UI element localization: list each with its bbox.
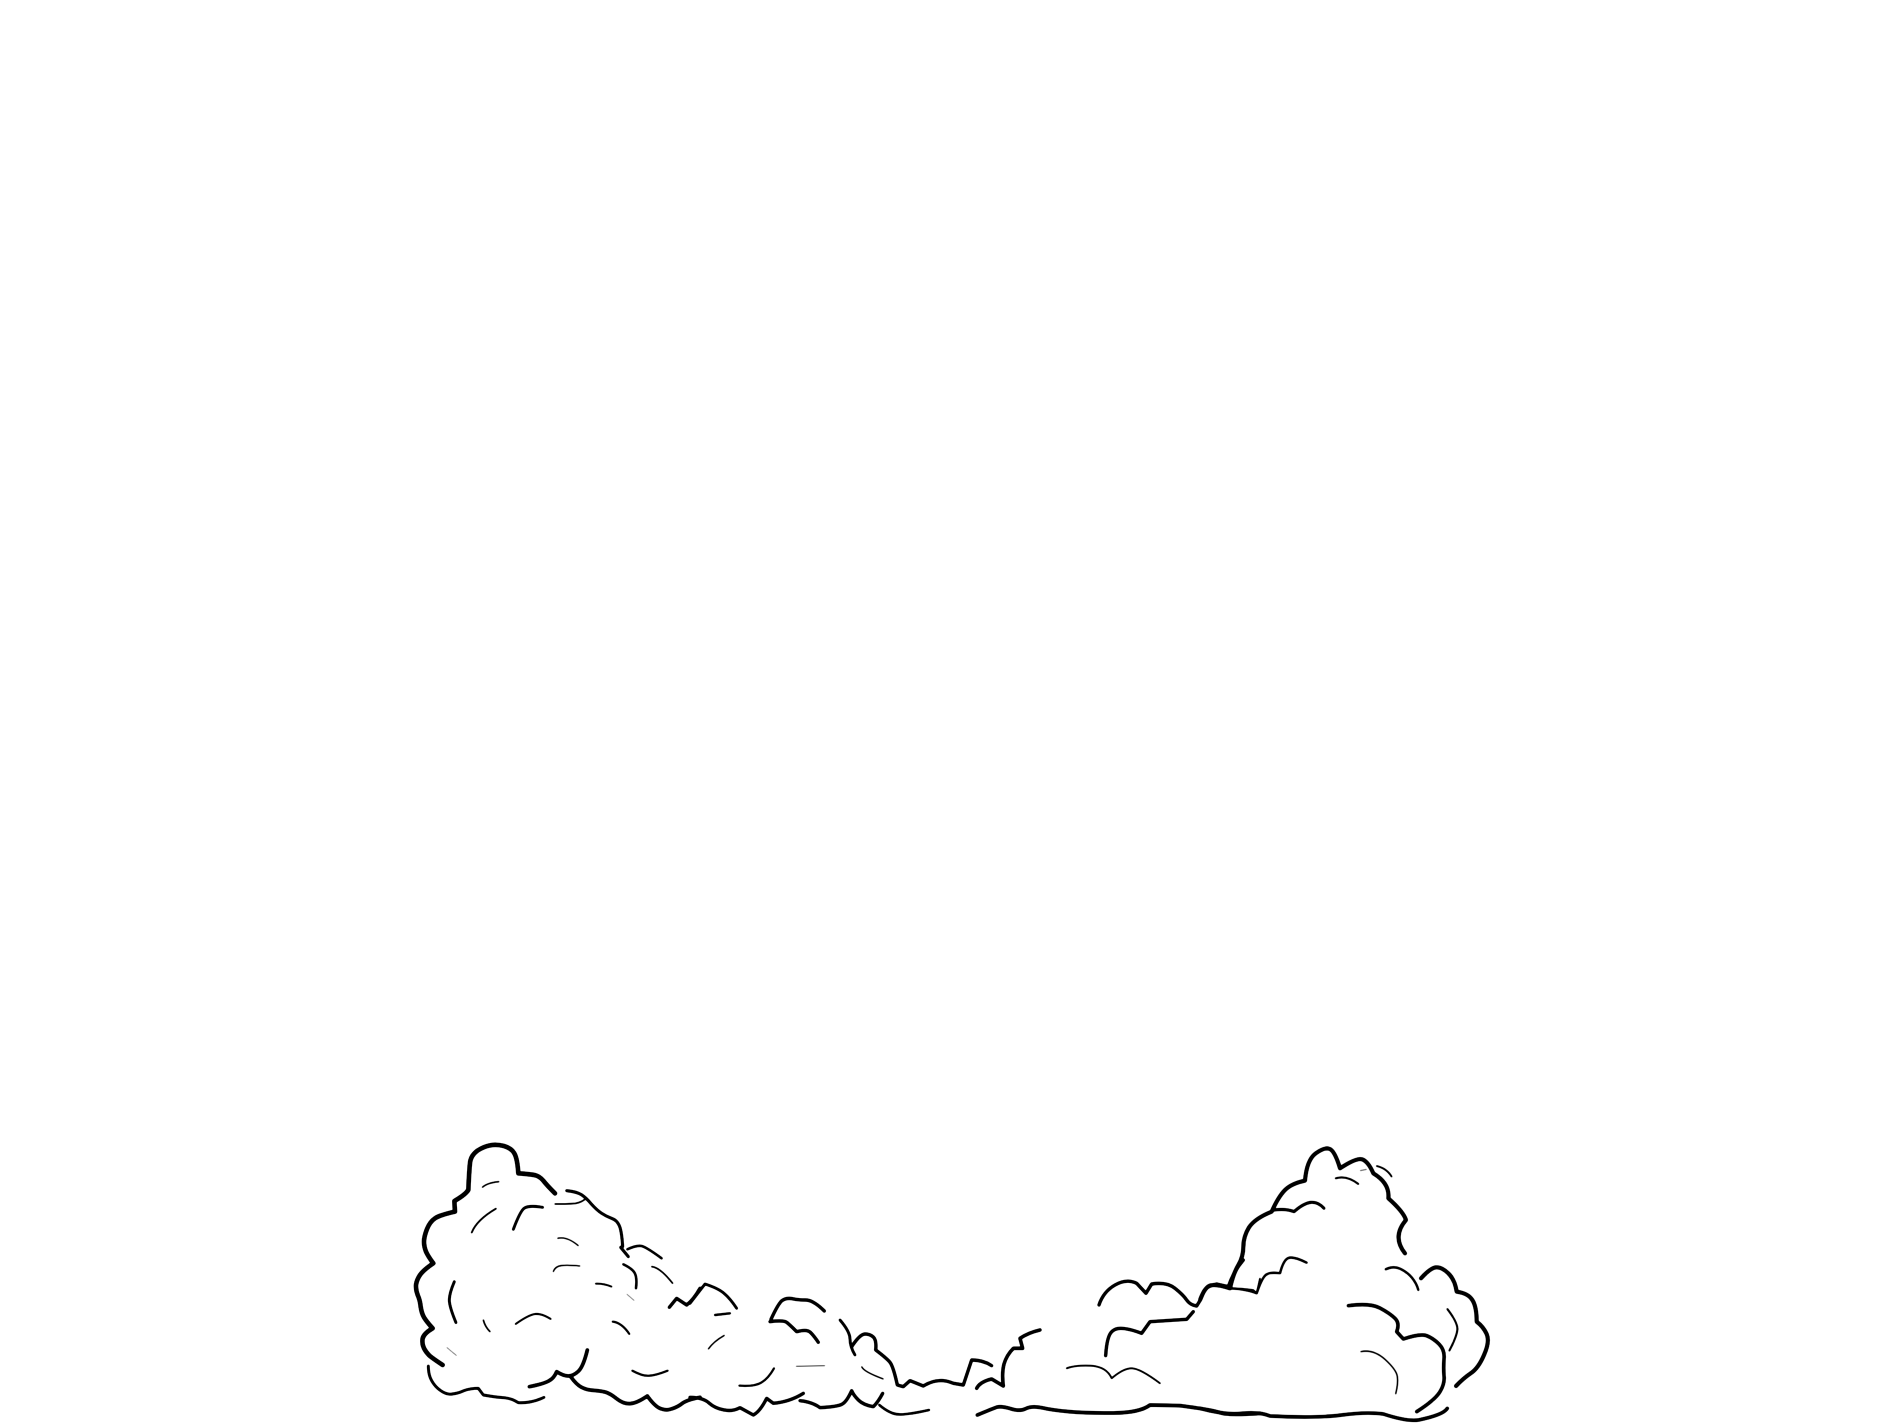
cloud: large left cumulus (416, 1145, 700, 1410)
cloud: large right cumulus (1200, 1148, 1488, 1420)
cloud: right side ridge with ground line (977, 1260, 1260, 1415)
cloud: low central puffs and ground line (690, 1284, 1040, 1415)
